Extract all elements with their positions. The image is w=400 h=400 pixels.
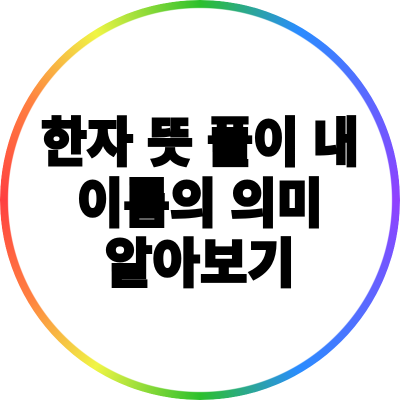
title: 알아보기	[105, 235, 295, 294]
title: 한자 뜻 풀이 내	[41, 114, 359, 173]
title: 이름의 의미	[77, 175, 323, 234]
